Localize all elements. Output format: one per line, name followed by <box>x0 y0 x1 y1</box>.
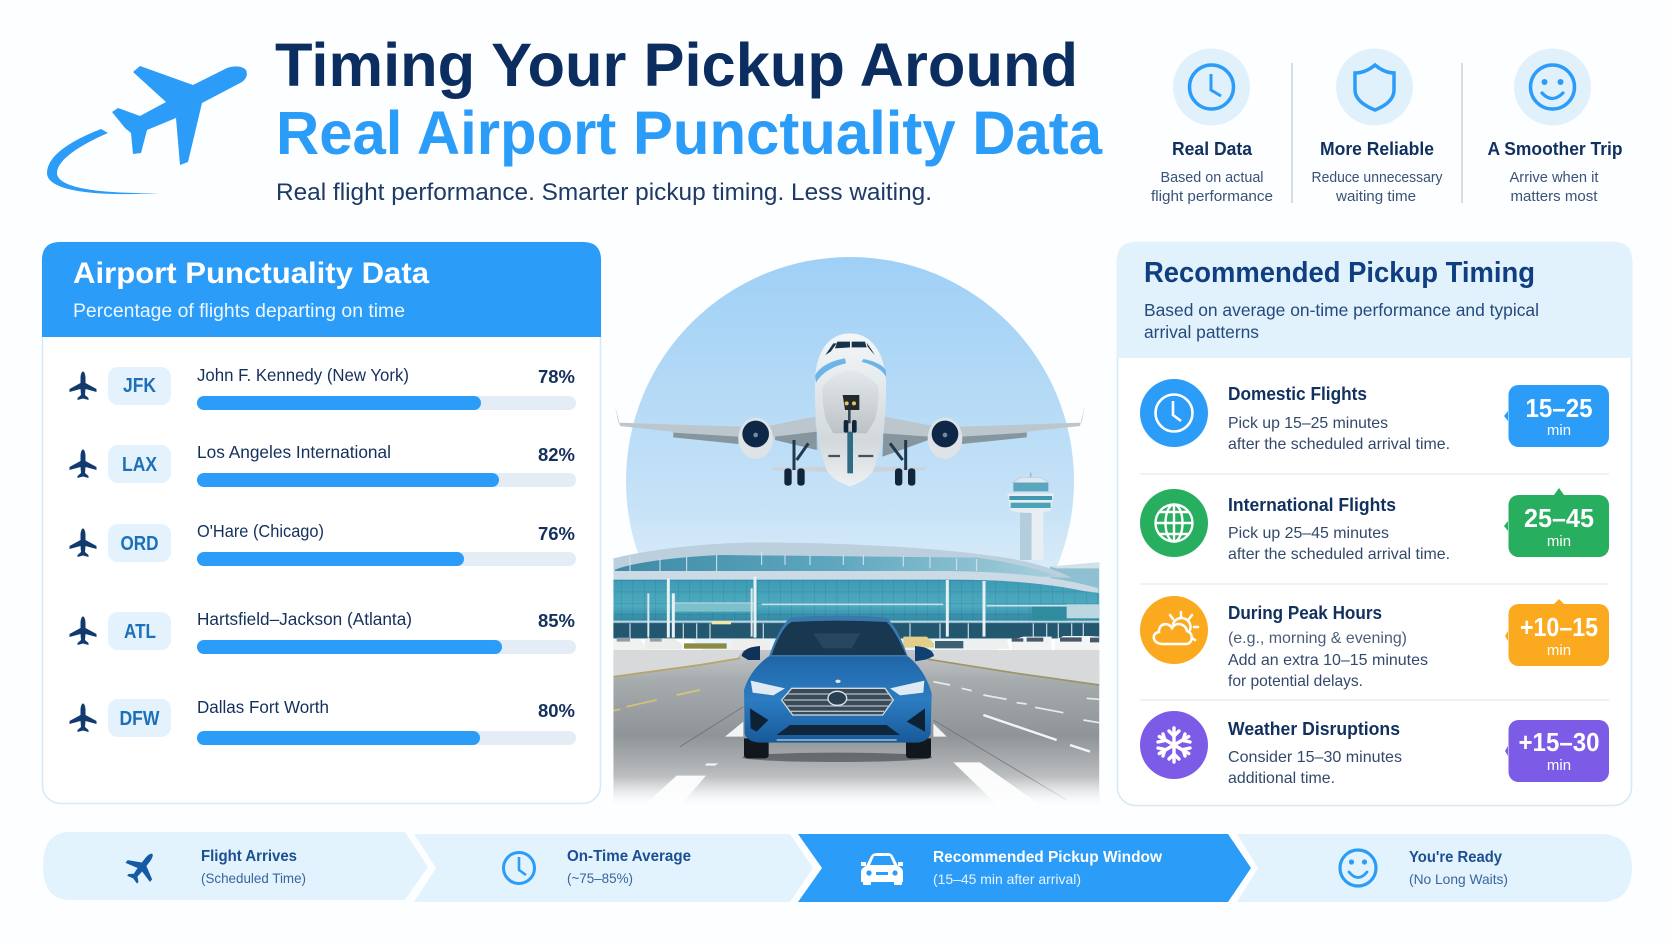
row: international flights <box>1140 488 1609 563</box>
benefit: a smoother trip: A Smoother Trip <box>1488 139 1623 159</box>
panel header: arrival patterns <box>1144 322 1259 342</box>
step: you're ready: (No Long Waits) <box>1409 871 1508 887</box>
row: LAX: 82% <box>538 445 575 465</box>
row: JFK <box>70 365 576 410</box>
benefit: a smoother trip <box>1488 48 1623 205</box>
row: ORD <box>70 521 576 566</box>
step: recommended pickup window <box>798 834 1251 902</box>
row: ATL: 85% <box>538 611 575 631</box>
row: domestic flights: Pick up 15–25 minutes <box>1228 415 1388 432</box>
row: domestic flights: Domestic Flights <box>1228 384 1367 404</box>
badge: 25–45 min: min <box>1547 533 1571 550</box>
benefit: a smoother trip: matters most <box>1510 188 1598 205</box>
benefit: real data: Based on actual <box>1160 169 1264 186</box>
step: on-time average <box>414 834 813 902</box>
badge: +10–15 min: +10–15 <box>1520 612 1598 642</box>
badge: +15–30 min: +15–30 <box>1518 727 1600 757</box>
row: DFW <box>70 697 576 745</box>
row: LAX <box>70 442 576 487</box>
title <box>275 31 1103 167</box>
row: international flights: Pick up 25–45 minutes <box>1228 525 1389 542</box>
badge: 15–25 min: 15–25 <box>1526 393 1592 423</box>
panel: recommended pickup timing <box>1117 242 1632 806</box>
road and car <box>613 616 1099 807</box>
step: on-time average: On-Time Average <box>567 848 691 865</box>
row: during peak hours: During Peak Hours <box>1228 603 1382 623</box>
badge: 25–45 min <box>1504 488 1609 557</box>
step: flight arrives: (Scheduled Time) <box>201 870 306 886</box>
icon: snowflake <box>1140 711 1208 779</box>
badge: 15–25 min <box>1504 385 1609 447</box>
step: you're ready <box>1237 834 1632 902</box>
row: international flights: International Flights <box>1228 495 1396 515</box>
benefit: more reliable <box>1312 48 1443 205</box>
row: ORD: 76% <box>538 524 575 544</box>
step: flight arrives <box>43 832 428 900</box>
badge: 15–25 min: min <box>1547 422 1571 439</box>
title: Real Airport Punctuality Data <box>276 99 1103 167</box>
sky circle <box>626 257 1074 705</box>
step: on-time average: (~75–85%) <box>567 870 633 886</box>
row: JFK: JFK <box>123 375 156 397</box>
row: during peak hours <box>1140 596 1609 690</box>
row: ATL <box>70 609 576 654</box>
row: weather disruptions: Weather Disruptions <box>1228 719 1400 739</box>
benefit: real data: flight performance <box>1151 188 1273 205</box>
badge: +15–30 min <box>1505 720 1609 782</box>
row: domestic flights: after the scheduled arrival time. <box>1228 436 1450 453</box>
badge: +10–15 min <box>1505 599 1609 666</box>
step: you're ready: You're Ready <box>1409 849 1502 866</box>
row: ATL: Hartsfield–Jackson (Atlanta) <box>197 609 412 629</box>
row: JFK: John F. Kennedy (New York) <box>197 365 409 385</box>
row: LAX: LAX <box>122 454 158 476</box>
icon: globe <box>1140 489 1208 557</box>
parked vehicles <box>614 636 1100 650</box>
icon: clock <box>1140 379 1208 447</box>
step: recommended pickup window: Recommended Pickup Window <box>933 849 1163 866</box>
row: LAX: Los Angeles International <box>197 442 391 462</box>
benefit: real data <box>1151 48 1273 205</box>
row: ORD: O'Hare (Chicago) <box>197 521 324 541</box>
step: recommended pickup window: (15–45 min after arrival) <box>933 871 1081 887</box>
panel header: Percentage of flights departing on time <box>73 301 405 322</box>
row: international flights: after the scheduled arrival time. <box>1228 546 1450 563</box>
row: during peak hours: Add an extra 10–15 minutes <box>1228 652 1428 669</box>
row: during peak hours: for potential delays. <box>1228 673 1363 690</box>
badge: +15–30 min: min <box>1547 757 1571 774</box>
badge: 25–45 min: 25–45 <box>1524 503 1594 533</box>
badge: +10–15 min: min <box>1547 642 1571 659</box>
row: ORD: ORD <box>120 533 158 555</box>
benefit: a smoother trip: Arrive when it <box>1510 169 1599 186</box>
panel header <box>42 242 601 337</box>
row: weather disruptions: additional time. <box>1228 770 1335 787</box>
timeline: pickup steps <box>43 832 1632 902</box>
row: DFW: 80% <box>538 701 575 721</box>
title: Timing Your Pickup Around <box>275 31 1078 99</box>
terminal building <box>613 542 1099 655</box>
benefit: more reliable: waiting time <box>1335 188 1416 205</box>
row: weather disruptions <box>1140 711 1609 787</box>
panel header <box>1117 242 1632 358</box>
icon: sun and cloud <box>1140 596 1208 664</box>
benefit: more reliable: More Reliable <box>1320 139 1434 159</box>
row: weather disruptions: Consider 15–30 minutes <box>1228 749 1402 766</box>
benefit: real data: Real Data <box>1172 139 1253 159</box>
panel: airport punctuality data <box>42 242 601 804</box>
panel header: Based on average on-time performance and typical <box>1144 300 1539 320</box>
panel header: Recommended Pickup Timing <box>1144 257 1535 289</box>
hero illustration: airport scene <box>613 257 1099 807</box>
subtitle: Real flight performance. Smarter pickup timing. Less waiting. <box>276 179 932 206</box>
benefit: more reliable: Reduce unnecessary <box>1312 169 1443 186</box>
logo: plane with swoosh <box>47 66 247 194</box>
row: ATL: ATL <box>124 621 156 643</box>
airplane <box>615 333 1085 487</box>
row: DFW: Dallas Fort Worth <box>197 697 329 717</box>
row: domestic flights <box>1140 379 1609 453</box>
step: flight arrives: Flight Arrives <box>201 848 297 865</box>
row: during peak hours: (e.g., morning & evening) <box>1228 630 1407 647</box>
row: JFK: 78% <box>538 367 575 387</box>
control tower <box>1007 473 1054 560</box>
car <box>742 616 934 762</box>
panel header: Airport Punctuality Data <box>73 257 429 290</box>
row: DFW: DFW <box>120 708 160 730</box>
